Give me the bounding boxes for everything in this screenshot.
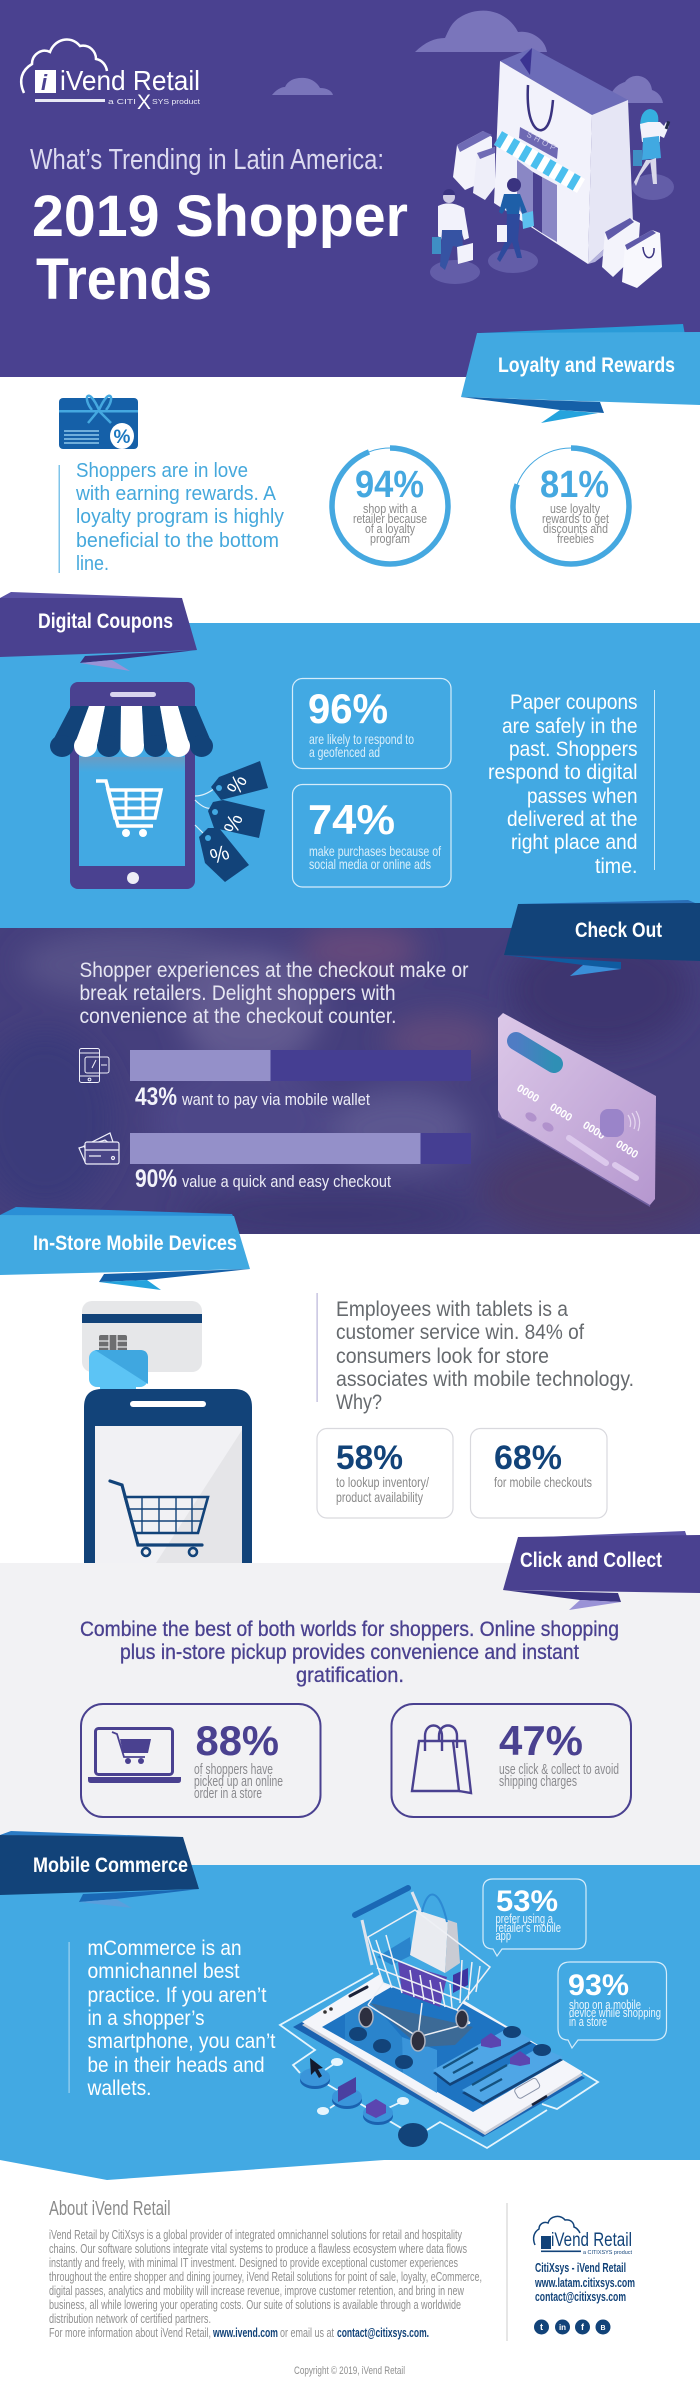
chart: 90 percent bar: 90% xyxy=(135,1165,177,1193)
icon: white shopping cart xyxy=(96,781,161,837)
callout: 93 percent xyxy=(558,1962,666,2048)
text block: loyalty intro xyxy=(58,460,284,575)
ribbon: click and collect xyxy=(503,1531,700,1610)
icon: gift card xyxy=(59,396,138,449)
stat card: 88 percent: picked up an online xyxy=(194,1773,283,1790)
text block: coupons copy: are safely in the xyxy=(502,715,638,738)
icons: social media xyxy=(534,2320,610,2334)
stat card: 74 percent: social media or online ads xyxy=(309,856,431,872)
heading: subtitle: What’s Trending in Latin America: xyxy=(30,144,384,176)
text block: coupons copy: past. Shoppers xyxy=(509,738,638,761)
panel: digital coupons xyxy=(0,592,700,928)
figure: woman with bags xyxy=(497,178,534,262)
illustration: credit card: 0000 xyxy=(547,1101,574,1124)
stat card: 74 percent: 74% xyxy=(308,796,395,843)
callout: 53 percent xyxy=(483,1879,586,1956)
ribbon: in-store mobile devices: In-Store Mobile Devices xyxy=(33,1232,237,1255)
text block: contact details xyxy=(534,2260,635,2304)
logo: iVend Retail: X xyxy=(137,91,151,114)
illustration: credit card: 0000 xyxy=(613,1138,640,1161)
illustration: shopping bag store xyxy=(430,48,674,288)
callout: 93 percent: in a store xyxy=(569,2014,607,2029)
stat card: 47 percent: use click & collect to avoid xyxy=(499,1761,619,1778)
chart: 94 percent ring: retailer because xyxy=(353,511,427,526)
stat card: 58 percent xyxy=(317,1428,453,1518)
stat card: 58 percent: product availability xyxy=(336,1489,423,1505)
text block: in-store copy: consumers look for store xyxy=(336,1345,549,1368)
logo: footer iVend Retail xyxy=(534,2216,633,2256)
text block: coupons copy: Paper coupons xyxy=(510,691,638,714)
text block: click and collect copy: plus in-store pickup provides convenience and instant xyxy=(120,1641,579,1664)
panel: mobile commerce xyxy=(0,1831,700,2180)
text block: about paragraph: or email us at xyxy=(280,2325,334,2340)
chart: 94 percent ring: shop with a xyxy=(363,501,418,516)
logo: iVend Retail: SYS product xyxy=(152,99,200,106)
text block: checkout copy: break retailers. Delight shoppers with xyxy=(80,982,396,1005)
text block: in-store copy xyxy=(316,1293,634,1414)
text block: mobile commerce copy: wallets. xyxy=(87,2077,152,2100)
text block: loyalty intro: loyalty program is highly xyxy=(76,506,284,528)
network nodes xyxy=(300,2058,428,2147)
logo: iVend Retail: iVend Retail xyxy=(60,65,200,96)
text block: about paragraph: chains. Our software solutions integrate vital systems to produce a flawless ecosystem where data flows xyxy=(49,2241,467,2256)
callout: 53 percent: 53% xyxy=(496,1885,558,1918)
heading: about: About iVend Retail xyxy=(49,2198,170,2220)
stat card: 47 percent xyxy=(392,1704,631,1817)
text block: mobile commerce copy: in a shopper’s xyxy=(88,2007,204,2030)
illustration: credit card xyxy=(498,1013,656,1207)
stat card: 74 percent xyxy=(292,784,451,887)
ribbon: click and collect: Click and Collect xyxy=(520,1549,662,1572)
icon: discount tags: % xyxy=(223,771,252,799)
right shopping bags xyxy=(602,218,662,288)
text block: checkout copy: Shopper experiences at the checkout make or xyxy=(80,959,469,982)
chart: 81 percent ring: rewards to get xyxy=(542,511,609,526)
text block: in-store copy: Employees with tablets is a xyxy=(336,1298,568,1321)
illustration: shopping bag store: SHOP xyxy=(525,130,560,154)
text block: contact details: CitiXsys - iVend Retail xyxy=(535,2260,626,2275)
text block: loyalty intro: Shoppers are in love xyxy=(76,460,248,482)
icon: small cloud xyxy=(272,78,333,95)
chart: 94 percent ring xyxy=(332,448,448,564)
ui rows on phone xyxy=(349,2026,563,2105)
stat card: 74 percent: make purchases because of xyxy=(309,843,441,859)
left shopping bags xyxy=(453,131,495,200)
chart: 81 percent ring xyxy=(513,448,629,564)
ribbon: mobile commerce xyxy=(0,1831,199,1908)
icon: shopping bag xyxy=(412,1726,471,1793)
background: blurred checkout photo xyxy=(0,924,700,1240)
icons: social media: B xyxy=(600,2325,606,2332)
illustration: isometric phone and cart xyxy=(280,1888,598,2148)
text block: in-store copy: customer service win. 84% of xyxy=(336,1321,584,1344)
text block: about paragraph: iVend Retail by CitiXsys is a global provider of integrated omnichannel solutions for retail and hospitality xyxy=(49,2227,462,2242)
text block: about paragraph: instantly and freely, with minimal IT investment. Designed to provide exceptional customer experiences xyxy=(49,2255,458,2270)
text block: about paragraph: throughout the entire shopper and dining journey, iVend Retail solutions for point of sale, loyalty, eCommerce, xyxy=(49,2269,482,2284)
stat card: 96 percent: are likely to respond to xyxy=(309,731,414,747)
text block: mobile commerce copy: smartphone, you can’t xyxy=(88,2030,276,2053)
panel: in-store mobile devices xyxy=(0,1207,700,1563)
text block: checkout copy xyxy=(80,959,469,1028)
text block: mobile commerce copy: mCommerce is an xyxy=(88,1937,242,1960)
text block: mobile commerce copy: practice. If you aren’t xyxy=(88,1984,267,2007)
logo: footer iVend Retail: iVend Retail xyxy=(551,2230,632,2251)
callout: 53 percent: prefer using a xyxy=(496,1911,554,1926)
illustration: credit card: 0000 xyxy=(580,1119,607,1142)
icons: social media: t xyxy=(540,2322,543,2332)
icon: discount tags xyxy=(195,761,268,882)
text block: about paragraph: For more information about iVend Retail, xyxy=(49,2325,211,2340)
illustration: card and phone reader xyxy=(82,1301,252,1563)
panel: check out xyxy=(0,900,700,1240)
ribbon: digital coupons: Digital Coupons xyxy=(38,610,173,633)
text block: about paragraph: digital passes, analytics and mobility will increase revenue, improve customer retention, and bring in new xyxy=(49,2283,464,2298)
panel: header xyxy=(0,0,700,377)
stat card: 58 percent: to lookup inventory/ xyxy=(336,1474,429,1490)
callout: 93 percent: 93% xyxy=(568,1969,629,2002)
icon: discount tags: % xyxy=(207,841,232,869)
text block: coupons copy xyxy=(488,690,655,878)
stat card: 68 percent: 68% xyxy=(494,1439,562,1477)
ribbon: digital coupons xyxy=(0,592,197,671)
chart: 81 percent ring: use loyalty xyxy=(550,501,600,516)
shopping cart on phone xyxy=(355,1888,490,2051)
heading: title line one: 2019 Shopper xyxy=(32,184,408,249)
logo: iVend Retail xyxy=(21,39,200,114)
icon: gift card: % xyxy=(114,427,131,448)
chart: 43 percent bar: 43% xyxy=(135,1083,177,1111)
logo: iVend Retail: a CITI xyxy=(108,99,136,106)
text block: loyalty intro: with earning rewards. A xyxy=(75,483,277,505)
text block: about paragraph: business, all while lowering your operating costs. Our suite of solutions is available through a worldwide xyxy=(49,2297,461,2312)
text block: loyalty intro: beneficial to the bottom xyxy=(76,530,279,552)
stat card: 96 percent: 96% xyxy=(308,685,388,732)
icon: discount tags: % xyxy=(220,811,248,836)
chart: 81 percent ring: 81% xyxy=(540,464,609,506)
icon: laptop with cart xyxy=(88,1728,181,1783)
text block: about paragraph: distribution network of certified partners. xyxy=(49,2311,211,2326)
text block: about paragraph: www.ivend.com xyxy=(212,2325,278,2340)
text block: coupons copy: respond to digital xyxy=(488,761,638,784)
ribbon: loyalty and rewards xyxy=(461,324,700,423)
icon: credit cards xyxy=(79,1133,119,1164)
text block: coupons copy: delivered at the xyxy=(507,808,638,831)
icons: social media: f xyxy=(581,2322,585,2332)
icon: navy shopping cart xyxy=(110,1481,208,1556)
text block: contact details: www.latam.citixsys.com xyxy=(534,2275,635,2290)
heading: title line two: Trends xyxy=(36,247,212,312)
stat card: 68 percent: for mobile checkouts xyxy=(494,1474,592,1490)
stat card: 88 percent: of shoppers have xyxy=(194,1761,273,1778)
text block: checkout copy: convenience at the checkout counter. xyxy=(80,1005,396,1028)
ribbon: mobile commerce: Mobile Commerce xyxy=(33,1854,188,1877)
logo: iVend Retail: i xyxy=(41,70,48,95)
panel: footer about xyxy=(49,2198,635,2377)
text block: loyalty intro: line. xyxy=(76,553,109,575)
chart: 90 percent bar xyxy=(130,1133,471,1193)
ribbon: check out: Check Out xyxy=(575,919,662,942)
icon: big cloud xyxy=(415,11,547,52)
logo: footer iVend Retail: a CITIXSYS product xyxy=(583,2250,633,2256)
figure: man with bags xyxy=(432,189,473,270)
chart: 94 percent ring: 94% xyxy=(355,464,424,506)
callout: 93 percent: device while shopping xyxy=(569,2005,661,2020)
text block: about paragraph: contact@citixsys.com. xyxy=(337,2325,429,2340)
text block: coupons copy: time. xyxy=(595,855,638,878)
stat card: 68 percent xyxy=(470,1428,607,1518)
copyright: Copyright © 2019, iVend Retail xyxy=(294,2365,405,2377)
icon: mobile wallet xyxy=(80,1048,109,1082)
chart: 43 percent bar xyxy=(130,1050,471,1111)
text block: in-store copy: Why? xyxy=(336,1391,382,1414)
illustration: credit card: 0000 xyxy=(514,1082,541,1105)
stat card: 88 percent: order in a store xyxy=(194,1785,262,1802)
stat card: 96 percent xyxy=(292,678,451,768)
chart: 94 percent ring: of a loyalty xyxy=(365,521,415,536)
stat card: 47 percent: shipping charges xyxy=(499,1773,577,1790)
icons: social media: in xyxy=(559,2323,566,2332)
text block: mobile commerce copy: omnichannel best xyxy=(88,1960,240,1983)
text block: click and collect copy xyxy=(80,1618,619,1687)
icon: cloud behind bag xyxy=(609,76,663,103)
text block: coupons copy: right place and xyxy=(511,831,638,854)
text block: mobile commerce copy xyxy=(68,1937,276,2100)
callout: 93 percent: shop on a mobile xyxy=(569,1997,641,2012)
callout: 53 percent: app xyxy=(496,1928,511,1943)
icon: storefront phone xyxy=(50,682,213,889)
chart: 81 percent ring: discounts and xyxy=(543,521,608,536)
stat card: 58 percent: 58% xyxy=(336,1439,403,1477)
text block: mobile commerce copy: be in their heads and xyxy=(88,2054,264,2077)
text block: coupons copy: passes when xyxy=(527,785,638,808)
stat card: 88 percent: 88% xyxy=(196,1717,279,1764)
figure: woman with phone xyxy=(633,109,670,186)
ribbon: in-store mobile devices xyxy=(0,1207,250,1290)
chart: 90 percent bar: value a quick and easy checkout xyxy=(182,1172,391,1191)
text block: in-store copy: associates with mobile technology. xyxy=(336,1368,634,1391)
text block: click and collect copy: gratification. xyxy=(296,1664,404,1687)
panel: click and collect xyxy=(0,1531,700,1865)
stat card: 88 percent xyxy=(81,1704,320,1817)
callout: 53 percent: retailer's mobile xyxy=(496,1920,561,1935)
text block: about paragraph xyxy=(49,2227,482,2340)
text block: click and collect copy: Combine the best of both worlds for shoppers. Online shopping xyxy=(80,1618,619,1641)
chart: 43 percent bar: want to pay via mobile wallet xyxy=(181,1090,370,1109)
text block: contact details: contact@citixsys.com xyxy=(535,2289,626,2304)
chart: 94 percent ring: program xyxy=(370,531,410,546)
stat card: 47 percent: 47% xyxy=(499,1717,583,1764)
panel: loyalty and rewards xyxy=(0,324,700,623)
ribbon: check out xyxy=(504,900,700,976)
chart: 81 percent ring: freebies xyxy=(557,531,594,546)
stat card: 96 percent: a geofenced ad xyxy=(309,744,380,760)
